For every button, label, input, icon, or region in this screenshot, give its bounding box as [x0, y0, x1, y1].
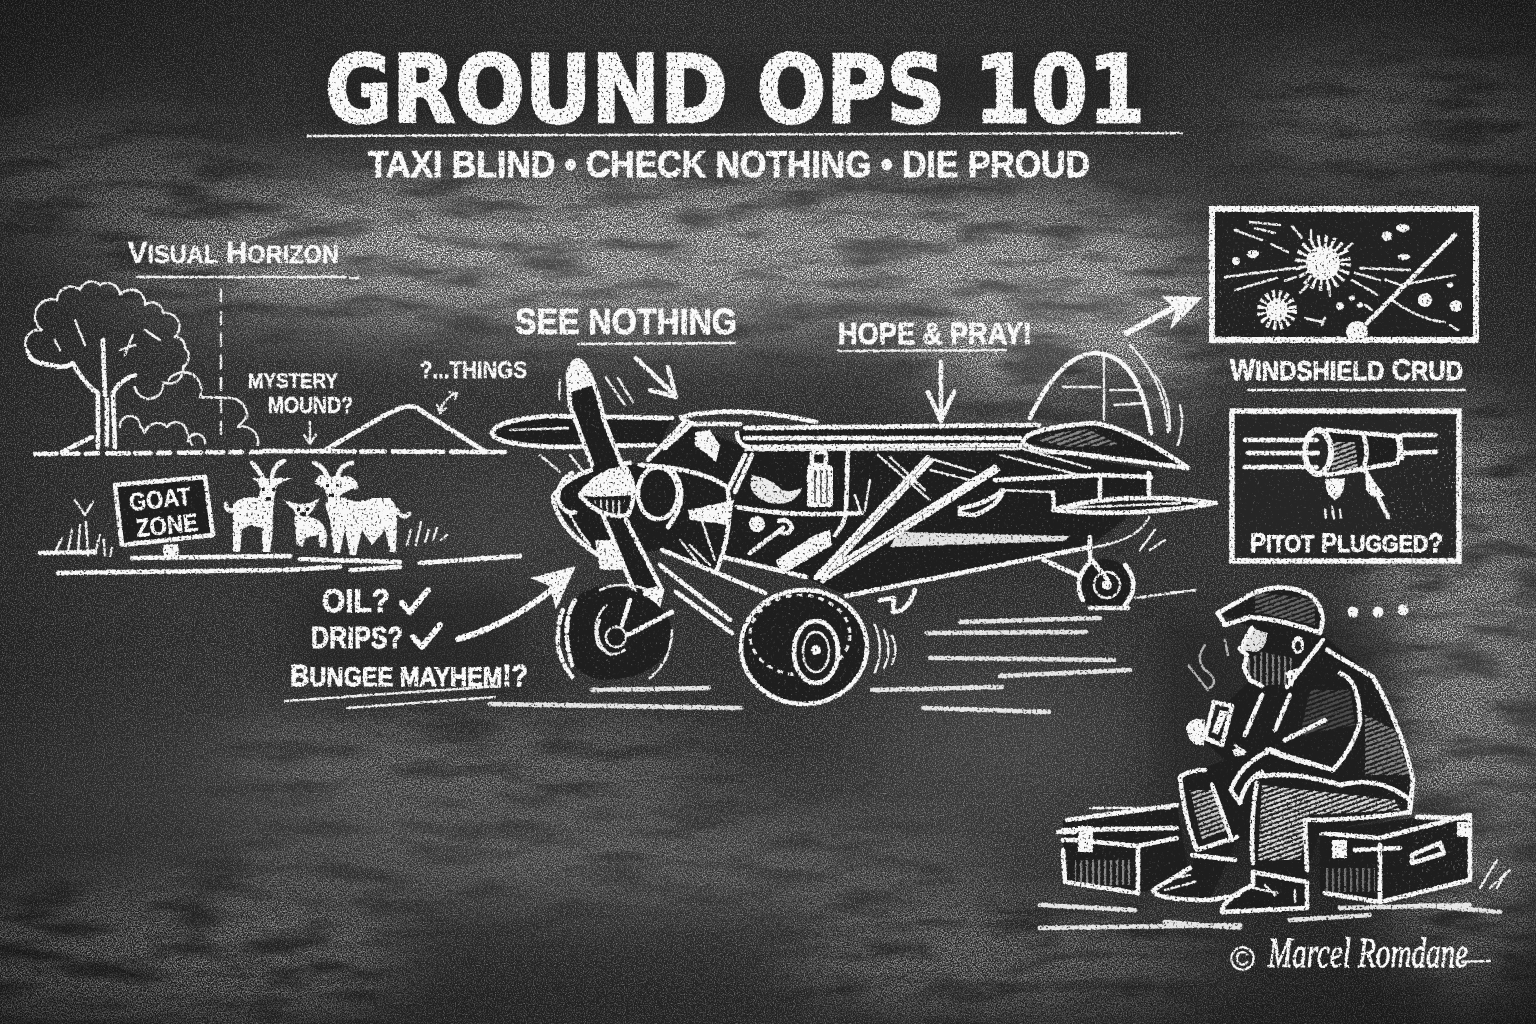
- label: windshield crud: WINDSHIELD CRUD: [1230, 354, 1463, 387]
- icon: oil bottle: [776, 530, 832, 570]
- frame: [1232, 411, 1459, 561]
- text: bungee mayhem: BUNGEE MAYHEM!?: [290, 658, 528, 693]
- title: GROUND OPS 101: [325, 36, 1145, 145]
- title underline: [308, 133, 1182, 136]
- icon: main splat: [1301, 241, 1345, 285]
- left wing: [492, 416, 672, 447]
- spinner: [580, 468, 636, 516]
- pilot boots: [1153, 855, 1307, 912]
- smudge on windshield: [695, 430, 720, 462]
- nose wheel: [558, 585, 672, 680]
- icon: right goat: [314, 463, 409, 555]
- upper cabin wing: [681, 412, 816, 424]
- label underline: [137, 277, 358, 278]
- pilot hand and cup: [1186, 702, 1246, 756]
- case: left: [1058, 805, 1190, 893]
- underline: [285, 686, 500, 708]
- landing gear struts: [660, 457, 998, 633]
- label: mystery mound: [248, 370, 353, 418]
- rear fuselage: [890, 445, 1151, 548]
- grass by case: [1480, 860, 1510, 888]
- frame: [1212, 209, 1476, 340]
- thought dots: [1348, 604, 1408, 618]
- pilot cap: [1218, 588, 1322, 633]
- main wheel: [741, 590, 867, 704]
- icon: croissant: [750, 475, 802, 504]
- pilot face: [1240, 628, 1304, 688]
- arrow: hope and pray: [928, 362, 954, 421]
- ground streaks: [1040, 905, 1500, 928]
- steam: [1188, 640, 1228, 690]
- tail wheel: [1044, 530, 1195, 611]
- pilot hand on knee: [1231, 752, 1267, 803]
- arrow: plug: [1365, 468, 1388, 517]
- case: right: [1320, 815, 1471, 902]
- panel: pitot plugged: [1232, 411, 1459, 561]
- icon: mystery mound: [327, 406, 483, 450]
- icon: thermos: [807, 452, 833, 507]
- panel: pilot on cases: [1040, 588, 1510, 928]
- subtitle: TAXI BLIND • CHECK NOTHING • DIE PROUD: [368, 144, 1090, 185]
- icon: baby goat: [283, 498, 327, 547]
- heading: hope and pray: HOPE & PRAY!: [838, 316, 1032, 351]
- streaks and specks: [1225, 222, 1462, 330]
- icon: check: [402, 590, 428, 612]
- label: visual horizon: VISUAL HORIZON: [128, 235, 339, 270]
- arrow: to bungee: [458, 566, 576, 639]
- arrow: to windshield: [1127, 296, 1203, 333]
- icon: left goat: [226, 461, 292, 552]
- propeller: [568, 360, 662, 607]
- fin: [1030, 345, 1182, 445]
- icon: check: [413, 625, 440, 647]
- label: things: ?...THINGS: [420, 357, 527, 384]
- label: pitot plugged: PITOT PLUGGED?: [1250, 528, 1443, 558]
- label: mystery mound: MYSTERY: [248, 370, 338, 393]
- icon: goat zone sign: [115, 477, 213, 559]
- pilot jacket: [1245, 640, 1413, 812]
- lower fuselage line: [846, 547, 1090, 596]
- grass left: [55, 500, 112, 556]
- panel: visual horizon scene: [25, 235, 527, 573]
- heading: see nothing: SEE NOTHING: [515, 301, 737, 342]
- copyright: ©: [1230, 940, 1255, 978]
- lower stabilizer: [1053, 498, 1216, 513]
- icon: wrench and gauge: [749, 516, 792, 553]
- icon: goat zone sign: ZONE: [135, 509, 199, 543]
- text: drips: DRIPS?: [311, 620, 403, 655]
- firewall and cowling: [553, 463, 734, 572]
- label: mystery mound: MOUND?: [268, 392, 353, 418]
- horizon line: [35, 452, 265, 454]
- arrow: things: [437, 392, 457, 413]
- underline: [1248, 389, 1465, 391]
- icon: second splat: [1262, 295, 1292, 325]
- grass right: [407, 522, 447, 545]
- windshield: [648, 422, 690, 460]
- icon: pitot tube: [1245, 430, 1436, 518]
- arrow: mound: [304, 422, 316, 444]
- cowl ring: [558, 473, 575, 513]
- icon: wiper: [1346, 235, 1455, 343]
- tailplane: [1023, 423, 1188, 468]
- pilot silhouette: [1153, 588, 1413, 912]
- checklist: [285, 583, 528, 708]
- icon: tree: [25, 281, 189, 452]
- signature flourish: [1462, 961, 1490, 962]
- main wing: [737, 425, 1040, 450]
- text: oil: OIL?: [322, 583, 390, 619]
- horizon line right: [265, 451, 505, 452]
- cabin: [723, 450, 930, 577]
- ground streaks: [40, 552, 520, 573]
- plane: [490, 345, 1216, 712]
- icon: bushes: [120, 372, 258, 445]
- fuselage: [553, 425, 1155, 595]
- signature: [1230, 931, 1490, 978]
- pilot trousers: [1180, 770, 1410, 870]
- icon: goat zone sign: GOAT: [128, 483, 192, 517]
- dashed visual horizon marker: [220, 290, 222, 443]
- bracket: [880, 590, 915, 612]
- panel: windshield crud: [1212, 209, 1476, 343]
- motion marks: [540, 378, 633, 472]
- plane ground streaks: [490, 618, 1130, 712]
- arrow: see nothing: [636, 358, 676, 397]
- underline: see nothing: [578, 343, 735, 344]
- underline: hope and pray: [838, 350, 1006, 351]
